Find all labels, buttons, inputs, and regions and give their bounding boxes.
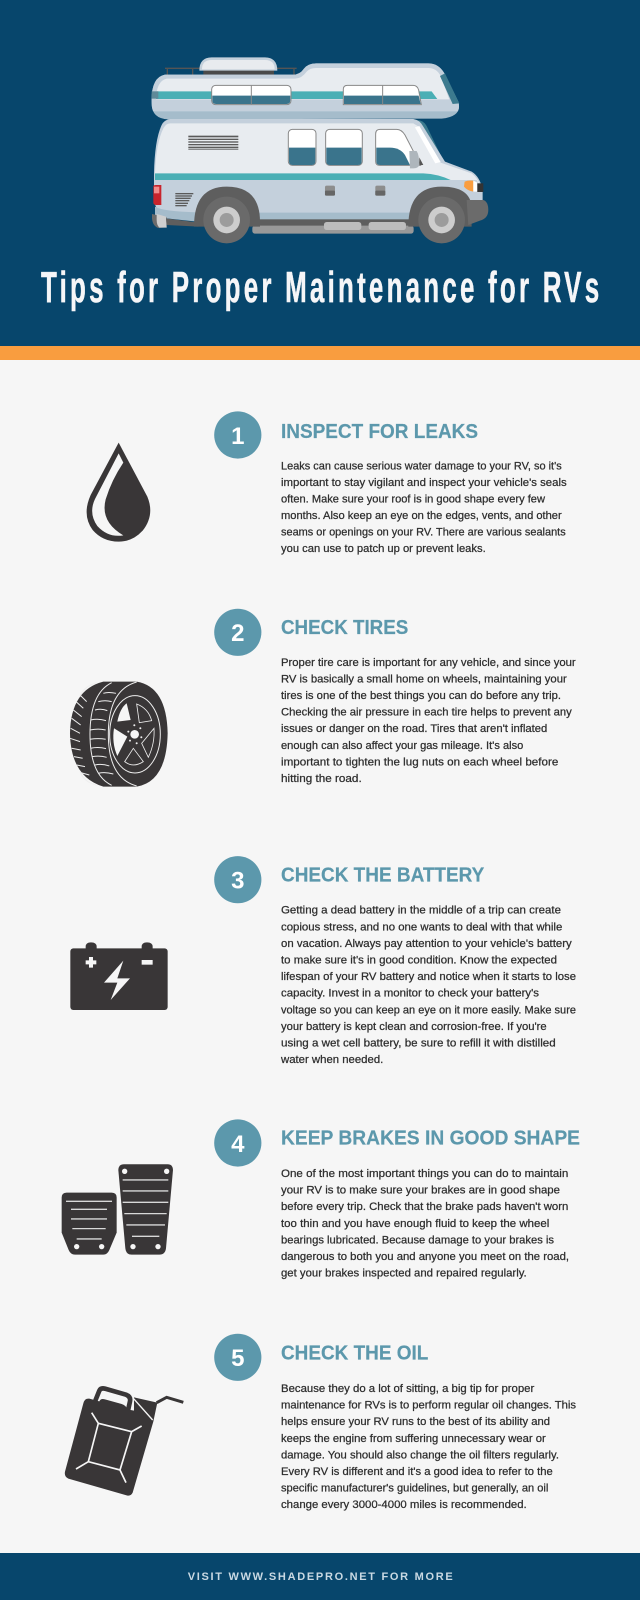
body text: to make sure it's in good condition. Know the expected (281, 954, 557, 966)
header panel (0, 0, 640, 346)
panel: tip 3 check the battery (70, 856, 576, 1066)
body text: Checking the air pressure in each tire helps to prevent any (281, 707, 572, 719)
number badge 2: 2 (231, 620, 244, 647)
number badge 2 (214, 609, 261, 656)
heading: CHECK THE OIL (281, 1341, 428, 1364)
heading: INSPECT FOR LEAKS (281, 420, 478, 443)
body text (281, 460, 567, 555)
body text: RV is basically a small home on wheels, maintaining your (281, 674, 567, 686)
body text: on vacation. Always pay attention to your vehicle's battery (281, 938, 572, 950)
number badge 5 (214, 1334, 261, 1381)
heading: KEEP BRAKES IN GOOD SHAPE (281, 1126, 580, 1149)
footer (0, 1553, 640, 1600)
body text: change every 3000-4000 miles is recommended. (281, 1499, 527, 1511)
body text: too thin and you have enough fluid to keep the wheel (281, 1218, 549, 1230)
body text: tires is one of the best things you can do before any trip. (281, 690, 561, 702)
body text: dangerous to both you and anyone you meet on the road, (281, 1251, 569, 1263)
body text: important to stay vigilant and inspect your vehicle's seals (281, 477, 567, 489)
body text: voltage so you can keep an eye on it more easily. Make sure (281, 1004, 576, 1016)
icon: brake pedals (62, 1164, 173, 1255)
body text: Leaks can cause serious water damage to your RV, so it's (281, 460, 562, 472)
body text: Getting a dead battery in the middle of a trip can create (281, 905, 561, 917)
orange divider band (0, 346, 640, 360)
icon: oil jerrycan (65, 1388, 183, 1496)
body text: before every trip. Check that the brake pads haven't worn (281, 1201, 568, 1213)
body text: capacity. Invest in a monitor to check your battery's (281, 988, 539, 1000)
heading: CHECK THE BATTERY (281, 864, 485, 887)
body text: enough can also affect your gas mileage. It's also (281, 740, 523, 752)
body text: damage. You should also change the oil filters regularly. (281, 1449, 559, 1461)
body text: you can use to patch up or prevent leaks. (281, 543, 486, 555)
panel: tip 4 keep brakes in good shape (62, 1119, 580, 1280)
footer text: VISIT WWW.SHADEPRO.NET FOR MORE (188, 1571, 453, 1583)
body text: get your brakes inspected and repaired regularly. (281, 1268, 527, 1280)
icon: tire (70, 682, 168, 787)
body text: using a wet cell battery, be sure to refill it with distilled (281, 1038, 556, 1050)
body text: lifespan of your RV battery and notice when it starts to lose (281, 971, 576, 983)
icon: water drop (87, 443, 150, 542)
body text: your battery is kept clean and corrosion-free. If you're (281, 1021, 547, 1033)
body text: bearings lubricated. Because damage to your brakes is (281, 1234, 554, 1246)
body text: One of the most important things you can do to maintain (281, 1168, 568, 1180)
body text: keeps the engine from suffering unnecessary wear or (281, 1433, 546, 1445)
body text: often. Make sure your roof is in good shape every few (281, 494, 546, 506)
number badge 3: 3 (231, 868, 244, 894)
body text: important to tighten the lug nuts on each wheel before (281, 756, 558, 768)
heading: CHECK TIRES (281, 616, 408, 639)
body text: maintenance for RVs is to perform regular oil changes. This (281, 1400, 576, 1412)
body text: issues or danger on the road. Tires that aren't inflated (281, 723, 547, 735)
number badge 5: 5 (231, 1345, 244, 1372)
number badge 4: 4 (231, 1131, 245, 1158)
body text (281, 1383, 576, 1511)
body text (281, 1168, 569, 1280)
body text: helps ensure your RV runs to the best of its ability and (281, 1416, 550, 1428)
body text: Every RV is different and it's a good idea to refer to the (281, 1466, 553, 1478)
panel: tip 1 inspect for leaks (87, 411, 567, 555)
number badge 4 (214, 1119, 261, 1167)
body text (280, 905, 576, 1066)
illustration: RV camper van (152, 57, 488, 243)
panel: tip 5 check the oil (65, 1334, 576, 1511)
number badge 1: 1 (231, 423, 244, 450)
body text: hitting the road. (281, 773, 362, 785)
body text: copious stress, and no one wants to deal with that while (281, 921, 562, 933)
title: Tips for Proper Maintenance for RVs (41, 262, 599, 312)
icon: battery (70, 942, 168, 1010)
panel: tip 2 check tires (70, 609, 576, 787)
body text: specific manufacturer's guidelines, but generally, an oil (281, 1483, 548, 1495)
body text (281, 657, 576, 785)
body text: water when needed. (280, 1054, 383, 1066)
body text: Because they do a lot of sitting, a big tip for proper (281, 1383, 535, 1395)
body text: seams or openings on your RV. There are various sealants (281, 526, 566, 538)
body text: your RV is to make sure your brakes are in good shape (281, 1185, 560, 1197)
body text: Proper tire care is important for any vehicle, and since your (281, 657, 576, 669)
number badge 3 (214, 856, 261, 903)
number badge 1 (214, 411, 261, 459)
body text: months. Also keep an eye on the edges, vents, and other (281, 510, 562, 522)
